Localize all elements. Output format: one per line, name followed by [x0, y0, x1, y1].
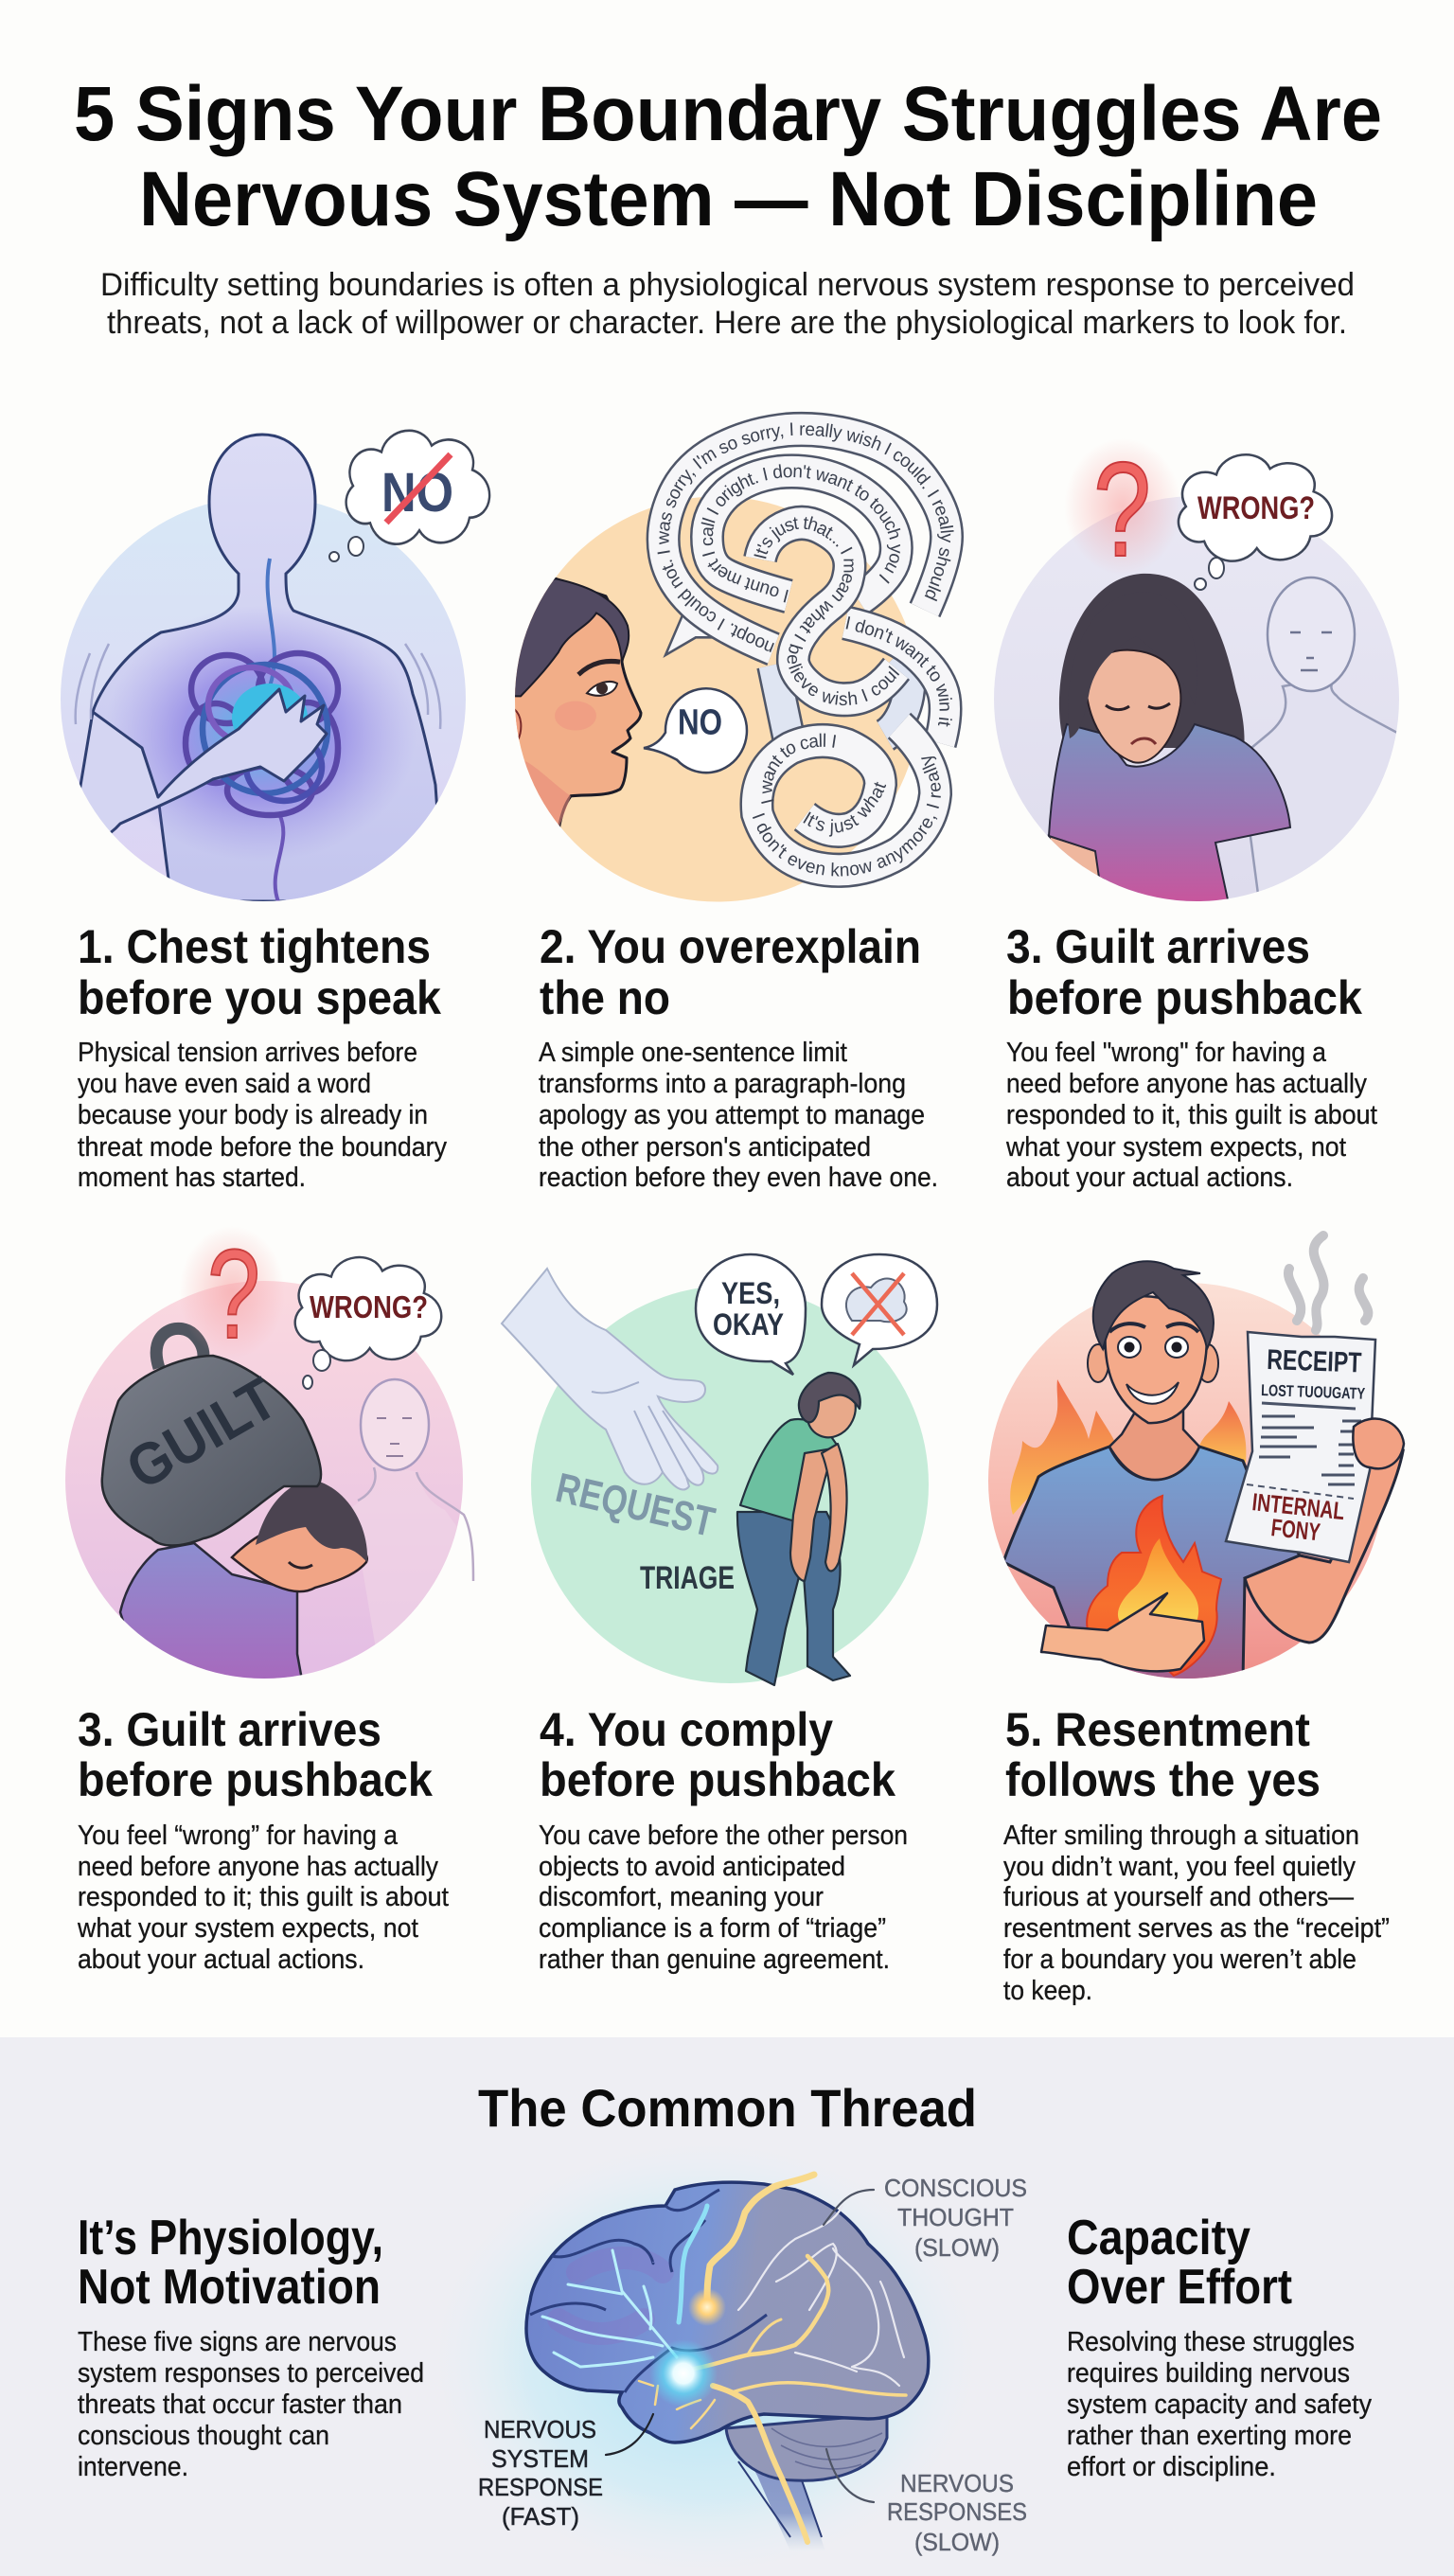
- heading: The Common Thread: [478, 2078, 977, 2138]
- card: 4 comply: compliance is a form of “triage”: [539, 1913, 886, 1944]
- illustration: chest tightens: [61, 431, 489, 904]
- icon: red question mark: ?: [1093, 435, 1151, 585]
- label: conscious thought: (SLOW): [914, 2233, 1000, 2262]
- ghost figure: [352, 1379, 473, 1666]
- label: nervous system response: NERVOUS: [484, 2415, 596, 2443]
- icon: red question mark: [179, 1224, 285, 1365]
- label: conscious thought: CONSCIOUS: [884, 2174, 1027, 2202]
- label: nervous system response: (FAST): [502, 2502, 579, 2531]
- ribbon text: [657, 422, 954, 877]
- right column: system capacity and safety: [1067, 2389, 1373, 2420]
- holding hand: [1353, 1419, 1404, 1468]
- card: 3 guilt repeat: 3. Guilt arrives: [78, 1703, 381, 1756]
- left column: intervene.: [78, 2452, 188, 2482]
- card: 5 resentment: resentment serves as the “receipt”: [1003, 1913, 1390, 1944]
- hand on chest: [1041, 1593, 1204, 1671]
- left column: [78, 2211, 424, 2482]
- right arm: [1245, 1451, 1403, 1643]
- ghost figure: [1240, 577, 1399, 901]
- subtitle: threats, not a lack of willpower or character. Here are the physiological markers to look for.: [107, 305, 1347, 341]
- illustration: overexplaining: [515, 411, 964, 901]
- ribbon text: I don't even know anymore, I really: [753, 756, 941, 877]
- illustration: guilt weight: [65, 1224, 473, 1685]
- label: nervous responses: NERVOUS: [900, 2469, 1014, 2497]
- card: 3 guilt repeat: about your actual actions.: [78, 1945, 364, 1975]
- speech bubble: YES, OKAY: OKAY: [713, 1307, 784, 1341]
- label: conscious thought: THOUGHT: [897, 2203, 1014, 2231]
- subtitle: Difficulty setting boundaries is often a physiological nervous system response to perceived: [100, 267, 1355, 303]
- left arm: [1047, 835, 1105, 879]
- right column: [1067, 2211, 1373, 2482]
- speech bubble: NO: NO: [678, 702, 722, 742]
- bent figure: [737, 1373, 864, 1685]
- card: 1 chest tightens: you have even said a word: [78, 1069, 371, 1099]
- ribbon text: I want to call I: [761, 733, 836, 804]
- receipt: FONY: [1269, 1513, 1321, 1546]
- card: 4 comply: [539, 1703, 908, 1975]
- icon: red question mark: [1064, 435, 1181, 585]
- thought cloud: WRONG?: [295, 1257, 441, 1389]
- card: 2 overexplain: reaction before they even have one.: [539, 1163, 938, 1193]
- label: nervous system response: RESPONSE: [478, 2473, 603, 2501]
- label: conscious thought: [884, 2174, 1027, 2262]
- card: 3 guilt arrives: need before anyone has actually: [1006, 1069, 1368, 1099]
- cerebellum: [726, 2414, 887, 2480]
- thought cloud: WRONG?: WRONG?: [1197, 490, 1315, 526]
- flames behind: [1010, 1379, 1246, 1515]
- card: 5 resentment: follows the yes: [1005, 1753, 1321, 1806]
- thought cloud: WRONG?: WRONG?: [310, 1289, 428, 1324]
- label: TRIAGE: TRIAGE: [640, 1560, 735, 1596]
- card: 3 guilt arrives: [1005, 920, 1377, 1193]
- cyan signal lines: [542, 2206, 707, 2367]
- card: 4 comply: 4. You comply: [540, 1703, 833, 1756]
- subtitle: [100, 267, 1355, 341]
- chest flame: [1087, 1496, 1221, 1676]
- card: 5 resentment: 5. Resentment: [1005, 1703, 1310, 1756]
- folds: [530, 2190, 767, 2392]
- card: 5 resentment: furious at yourself and others—: [1003, 1882, 1354, 1912]
- speech bubble: crossed out cloud: [822, 1254, 937, 1365]
- label: nervous responses: [887, 2469, 1027, 2556]
- card: 3 guilt arrives: about your actual actions.: [1006, 1163, 1293, 1193]
- card: 2 overexplain: the no: [540, 971, 670, 1024]
- left column: These five signs are nervous: [78, 2327, 397, 2357]
- ribbon text: noopt. I could not. I was sorry, I'm so sorry, I really wish I could. I really should: [657, 422, 954, 653]
- card: 5 resentment: After smiling through a situation: [1003, 1821, 1359, 1851]
- card: 2 overexplain: the other person's anticipated: [539, 1132, 871, 1163]
- card: 3 guilt repeat: You feel “wrong” for having a: [78, 1821, 398, 1851]
- illustration: guilt, person with question mark: [994, 435, 1399, 909]
- receipt: RECEIPT: [1267, 1344, 1362, 1378]
- title: 5 Signs Your Boundary Struggles Are: [74, 71, 1382, 157]
- card: 4 comply: objects to avoid anticipated: [539, 1852, 845, 1882]
- icon: guilt weight: GUILT: [115, 1365, 288, 1502]
- ribbon: overexplaining swirl: [664, 430, 947, 870]
- ribbon text: I ount mert I call I oright. I don't want to touch you I: [700, 464, 901, 602]
- brain stem: [734, 2424, 825, 2551]
- icon: guilt weight: [102, 1328, 321, 1545]
- card: 3 guilt arrives: You feel "wrong" for having a: [1006, 1038, 1326, 1068]
- card: 4 comply: You cave before the other person: [539, 1821, 908, 1851]
- illustration: comply: [502, 1254, 937, 1685]
- card: 4 comply: before pushback: [540, 1753, 895, 1806]
- card: 2 overexplain: A simple one-sentence limit: [539, 1038, 847, 1068]
- shirt: [1003, 1447, 1300, 1685]
- card: 4 comply: rather than genuine agreement.: [539, 1945, 890, 1975]
- card: 2 overexplain: apology as you attempt to manage: [539, 1100, 925, 1130]
- hair back: [1058, 574, 1245, 748]
- label: nervous responses: (SLOW): [914, 2528, 1000, 2556]
- card: 5 resentment: you didn’t want, you feel quietly: [1003, 1852, 1356, 1882]
- card: 3 guilt repeat: [77, 1703, 449, 1975]
- card: 1 chest tightens: before you speak: [78, 971, 441, 1024]
- receipt: LOST TUOUGATY: [1261, 1381, 1366, 1403]
- speech bubble: YES, OKAY: YES,: [721, 1276, 780, 1310]
- left column: threats that occur faster than: [78, 2389, 402, 2420]
- steam: [1288, 1235, 1368, 1330]
- title: Nervous System — Not Discipline: [139, 156, 1318, 242]
- illustration: resentment: [988, 1235, 1404, 1685]
- card: 3 guilt arrives: 3. Guilt arrives: [1006, 920, 1310, 973]
- receipt: INTERNAL: [1250, 1487, 1346, 1525]
- white signal lines: [738, 2206, 904, 2386]
- face in profile: [515, 577, 642, 827]
- right column: rather than exerting more: [1067, 2421, 1352, 2451]
- card: 2 overexplain: 2. You overexplain: [540, 920, 921, 973]
- card: 3 guilt arrives: before pushback: [1007, 971, 1362, 1024]
- face: [1086, 650, 1180, 763]
- card: 1 chest tightens: Physical tension arrives before: [78, 1038, 417, 1068]
- ribbon text: It's just what: [803, 782, 886, 837]
- card: 1 chest tightens: because your body is already in: [78, 1100, 428, 1130]
- card: 2 overexplain: [539, 920, 938, 1193]
- reaching hand: [502, 1269, 718, 1490]
- card: 5 resentment: to keep.: [1003, 1976, 1092, 2006]
- card: 3 guilt repeat: need before anyone has actually: [78, 1852, 439, 1882]
- right column: Resolving these struggles: [1067, 2327, 1355, 2357]
- card: 1 chest tightens: threat mode before the boundary: [78, 1132, 448, 1163]
- card: 3 guilt arrives: responded to it, this guilt is about: [1006, 1100, 1377, 1130]
- card: 1 chest tightens: 1. Chest tightens: [78, 920, 431, 973]
- label: nervous system response: SYSTEM: [491, 2444, 589, 2473]
- card: 5 resentment: for a boundary you weren’t able: [1003, 1945, 1356, 1975]
- yellow signal lines: [639, 2175, 906, 2542]
- left column: system responses to perceived: [78, 2358, 424, 2389]
- ribbon text: I don't want to win it: [846, 616, 952, 727]
- card: 3 guilt repeat: before pushback: [78, 1753, 433, 1806]
- label: REQUEST: REQUEST: [552, 1465, 719, 1546]
- head: [1088, 1261, 1218, 1480]
- thought cloud: WRONG?: [1179, 454, 1332, 590]
- speech bubble: NO: [644, 688, 747, 773]
- card: 2 overexplain: transforms into a paragraph-long: [539, 1069, 906, 1099]
- right column: Capacity: [1067, 2211, 1250, 2265]
- label: nervous responses: RESPONSES: [887, 2497, 1027, 2526]
- left column: Not Motivation: [78, 2260, 381, 2315]
- card: 3 guilt repeat: what your system expects, not: [77, 1913, 418, 1944]
- card: 1 chest tightens: moment has started.: [78, 1163, 306, 1193]
- shirt: [1049, 724, 1290, 904]
- person under weight: [120, 1480, 367, 1685]
- panel: the common thread: [0, 2037, 1454, 2576]
- leader lines: [606, 2190, 874, 2502]
- speech bubble: YES, OKAY: [696, 1254, 806, 1375]
- right column: effort or discipline.: [1067, 2452, 1276, 2482]
- card: 4 comply: discomfort, meaning your: [539, 1882, 824, 1912]
- card: 3 guilt arrives: what your system expects, not: [1005, 1132, 1346, 1163]
- illustration: brain: [431, 2140, 980, 2575]
- glowing nodes: [649, 2339, 718, 2407]
- title: [74, 71, 1382, 242]
- left column: conscious thought can: [78, 2421, 329, 2451]
- receipt: [1226, 1332, 1375, 1562]
- card: 5 resentment: [1003, 1703, 1390, 2006]
- card: 3 guilt repeat: responded to it; this guilt is about: [78, 1882, 449, 1912]
- card: 1 chest tightens: [78, 920, 448, 1193]
- left column: It’s Physiology,: [78, 2211, 383, 2265]
- cerebrum: [526, 2182, 929, 2443]
- right column: requires building nervous: [1067, 2358, 1350, 2389]
- right column: Over Effort: [1067, 2260, 1292, 2315]
- icon: thought cloud with crossed NO: NO: [381, 462, 453, 524]
- icon: red question mark: ?: [207, 1224, 260, 1365]
- label: nervous system response: [478, 2415, 603, 2531]
- icon: thought cloud with crossed NO: [329, 431, 489, 561]
